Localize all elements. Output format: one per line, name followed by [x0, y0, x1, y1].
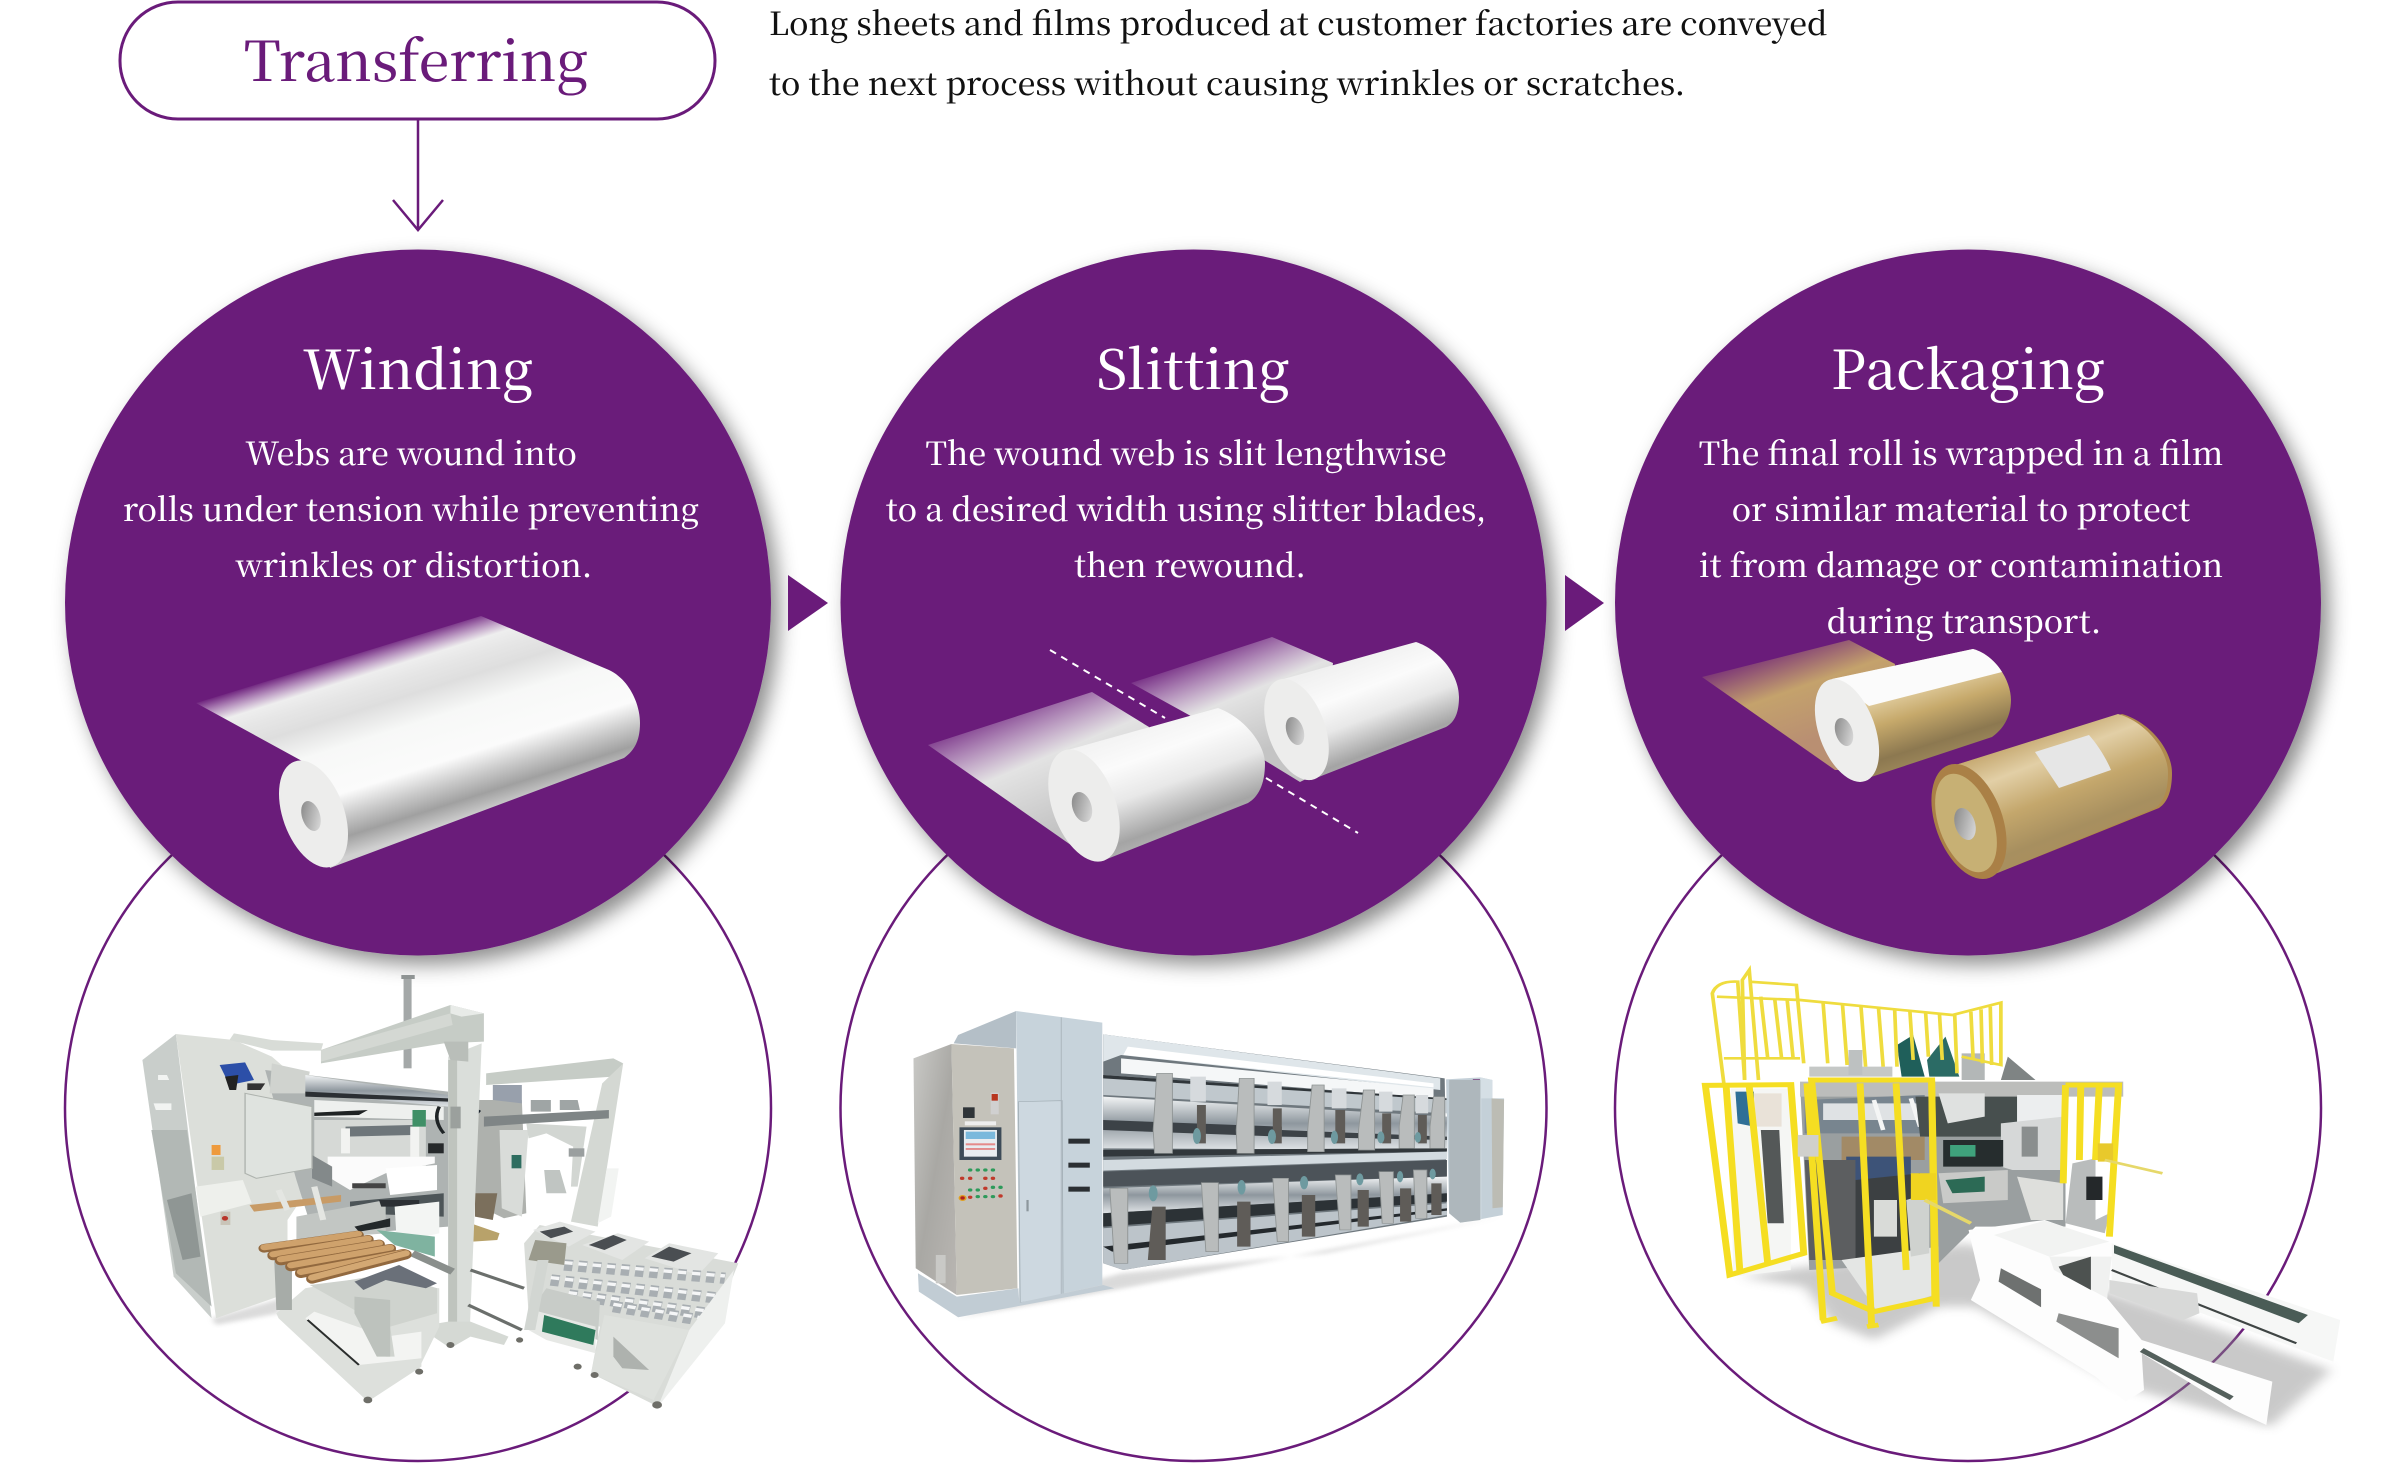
text block: winding description: wrinkles or distortion. — [235, 541, 592, 587]
front conveyor beam — [1969, 1220, 2272, 1425]
icon: winding roll — [196, 616, 640, 877]
icon: slitting rolls — [928, 637, 1459, 871]
header pill: Transferring — [120, 2, 715, 119]
text block: packaging description: The final roll is wrapped in a film — [1699, 429, 2223, 475]
arrow: down from header — [393, 119, 443, 230]
panel: slitting circle — [840, 250, 1546, 956]
text block: slitting description: then rewound. — [1074, 541, 1306, 587]
header pill: Transferring: Transferring — [244, 18, 588, 97]
text block: slitting description: The wound web is slit lengthwise — [925, 429, 1447, 475]
heading: Slitting: Slitting — [1096, 328, 1290, 405]
machine photo: winder — [142, 975, 738, 1409]
icon: packaging rolls — [1702, 640, 2172, 889]
outline circle: slitting machine — [840, 755, 1546, 1461]
rear conveyor beam — [2109, 1243, 2340, 1362]
intro text: to the next process without causing wrinkles or scratches. — [769, 59, 1685, 105]
text block: packaging description: during transport. — [1827, 597, 2101, 643]
machine photo: packaging line — [1705, 970, 2340, 1427]
outline circle: packaging machine — [1615, 755, 2321, 1461]
arrow: winding to slitting — [788, 575, 828, 631]
intro text: Long sheets and films produced at customer factories are conveyed — [769, 0, 1827, 45]
text block: winding description: rolls under tension while preventing — [123, 485, 699, 531]
machine photo: slitter — [913, 1011, 1504, 1318]
text block: packaging description: or similar material to protect — [1732, 485, 2190, 531]
outline circle: winding machine — [65, 755, 771, 1461]
text block: slitting description: to a desired width using slitter blades, — [886, 485, 1486, 531]
arrow: slitting to packaging — [1565, 575, 1604, 631]
text block: winding description: Webs are wound into — [245, 429, 577, 475]
heading: Packaging: Packaging — [1831, 328, 2105, 405]
panel: packaging circle — [1615, 250, 2321, 956]
heading: Winding: Winding — [303, 328, 533, 405]
text block: packaging description: it from damage or contamination — [1699, 541, 2223, 587]
panel: winding circle — [65, 250, 771, 956]
